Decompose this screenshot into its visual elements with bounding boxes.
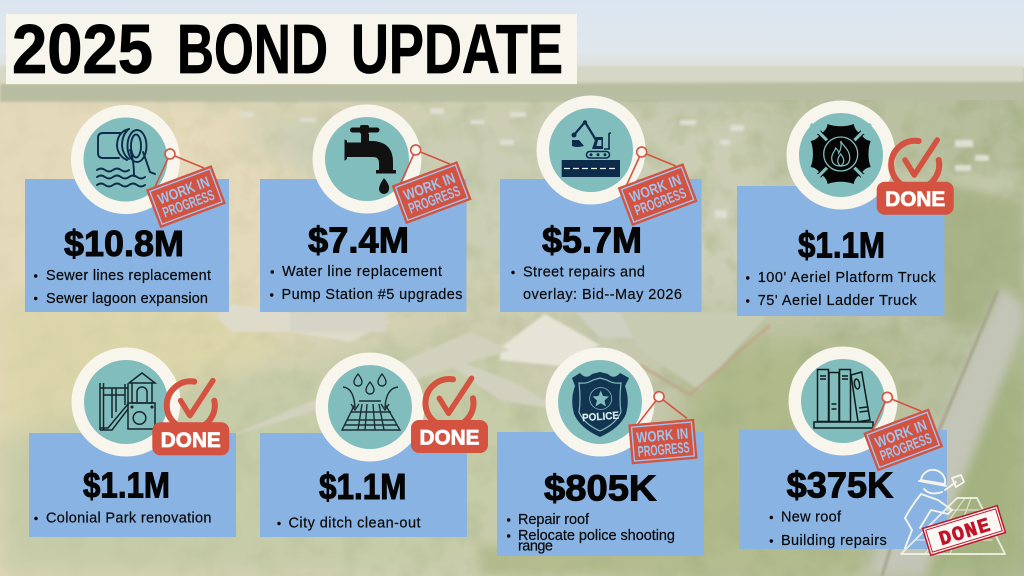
title banner: 2025	[12, 10, 153, 88]
bullet list: Relocate police shooting	[518, 528, 675, 544]
panel: police	[497, 348, 704, 556]
icon: sewer pipe	[71, 105, 180, 214]
price: $805K	[544, 468, 656, 509]
badge: done	[877, 140, 954, 215]
badge: work in progress: WORK IN	[627, 172, 684, 206]
icon: police badge	[546, 348, 654, 456]
icon: drainage grate	[316, 352, 424, 462]
icon: excavator on road	[536, 96, 646, 204]
bullet list: Repair roof	[518, 512, 590, 528]
price: $1.1M	[319, 466, 406, 507]
badge: done: DONE	[885, 188, 945, 211]
icon: water faucet	[312, 104, 422, 214]
badge: done	[152, 381, 229, 455]
price: $375K	[787, 464, 893, 505]
bullet list	[270, 264, 462, 303]
badge: work in progress: WORK IN	[636, 425, 689, 447]
bullet list	[746, 270, 936, 309]
badge: done	[411, 378, 488, 453]
icon: roofer with hammer	[901, 470, 1005, 554]
badge: done: DONE	[420, 426, 480, 450]
price: $7.4M	[308, 220, 409, 261]
bullet list: overlay: Bid--May 2026	[523, 287, 682, 303]
icon: playground	[72, 348, 180, 456]
bullet list: Water line replacement	[282, 264, 442, 280]
icon: fire department cross	[786, 100, 896, 210]
bullet list: Colonial Park renovation	[46, 511, 212, 527]
bullet list: Sewer lagoon expansion	[46, 291, 208, 307]
panel: sewer	[25, 105, 229, 312]
bullet list: Street repairs and	[523, 265, 645, 281]
panel: library	[739, 346, 947, 549]
badge: work in progress	[607, 135, 698, 226]
badge: work in progress: PROGRESS	[878, 430, 934, 465]
bullet list: Pump Station #5 upgrades	[282, 287, 462, 303]
price: $5.7M	[542, 220, 642, 261]
badge: work in progress: WORK IN	[873, 417, 929, 452]
badge: work in progress	[135, 137, 226, 228]
badge: done: DONE	[161, 429, 221, 452]
bullet list: 75' Aeriel Ladder Truck	[758, 293, 917, 309]
badge: work in progress: WORK IN	[156, 174, 212, 208]
panel: fire trucks	[737, 100, 954, 316]
panel: ditch	[260, 352, 488, 537]
panel: water	[260, 104, 472, 312]
stamp: done	[923, 506, 1006, 556]
panel: streets	[500, 96, 702, 312]
bullet list	[511, 265, 682, 303]
bullet list: range	[518, 538, 553, 554]
badge: work in progress	[853, 380, 943, 471]
price: $1.1M	[83, 464, 170, 505]
bullet list	[507, 512, 675, 554]
icon: books on shelf	[788, 346, 898, 456]
badge: work in progress	[381, 133, 472, 224]
icon: police badge: POLICE	[582, 410, 619, 424]
bullet list: Building repairs	[781, 533, 887, 549]
badge: work in progress	[626, 389, 698, 464]
title banner: UPDATE	[351, 10, 563, 88]
stamp: done: DONE	[937, 515, 993, 552]
panel: park	[29, 348, 236, 537]
badge: work in progress: PROGRESS	[406, 183, 463, 218]
price: $1.1M	[798, 225, 885, 266]
badge: work in progress: PROGRESS	[632, 185, 689, 220]
title banner: BOND	[177, 10, 328, 88]
bullet list: 100' Aeriel Platform Truck	[758, 270, 936, 286]
bullet list	[34, 268, 211, 307]
title banner	[6, 10, 577, 88]
bullet list: New roof	[781, 510, 842, 526]
price: $10.8M	[64, 223, 184, 264]
bullet list: City ditch clean-out	[288, 516, 420, 532]
badge: work in progress: PROGRESS	[637, 439, 690, 461]
badge: work in progress: WORK IN	[401, 170, 458, 204]
bullet list: Sewer lines replacement	[46, 268, 211, 284]
badge: work in progress: PROGRESS	[160, 187, 217, 222]
bullet list	[770, 510, 887, 549]
